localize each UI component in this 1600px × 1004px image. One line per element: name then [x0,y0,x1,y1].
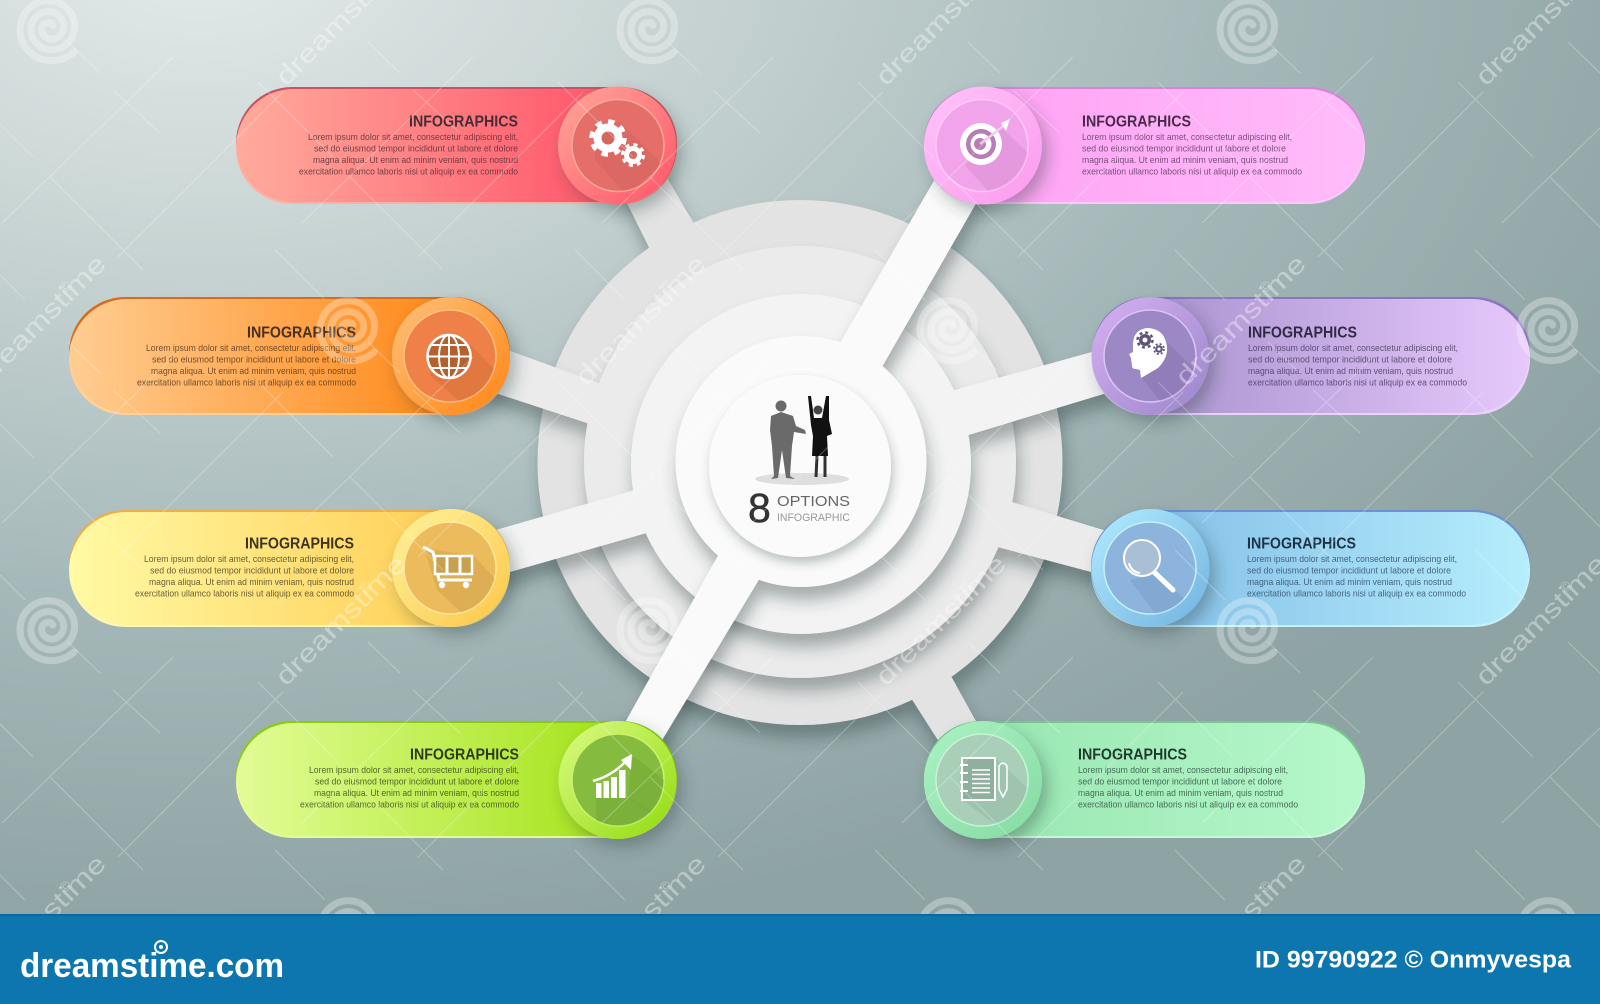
body text [1082,132,1302,178]
watermark overlay: © [56,277,75,296]
body text: sed do eiusmod tempor incididunt ut labore et dolore [315,776,519,788]
footer logo: dreamstime.com [20,947,284,985]
body text [1078,765,1298,810]
body text [135,554,354,600]
panel: pink option [924,86,1365,205]
body text [300,765,519,810]
watermark overlay: dreamstime [569,848,712,991]
body text [1248,343,1467,388]
panel: mint option [924,721,1365,839]
heading: INFOGRAPHICS [1248,324,1357,342]
body text: sed do eiusmod tempor incididunt ut labore et dolore [152,354,356,366]
watermark overlay: © [1256,877,1275,896]
body text: Lorem ipsum dolor sit amet, consectetur adipiscing elit, [146,343,356,354]
watermark overlay: © [656,277,675,296]
heading: INFOGRAPHICS [1082,114,1191,130]
panel: yellow option [69,509,510,627]
icon: gears [558,86,680,210]
body text: sed do eiusmod tempor incididunt ut labore et dolore [1082,144,1286,154]
heading: INFOGRAPHICS [245,536,354,552]
body text: exercitation ullamco laboris nisi ut aliquip ex ea commodo [137,378,356,388]
hub: outer ring with red and mint arms [538,150,1062,770]
watermark overlay: dreamstime [1169,848,1312,991]
body text: magna aliqua. Ut enim ad minim veniam, quis nostrud [1082,155,1288,166]
body text: magna aliqua. Ut enim ad minim veniam, quis nostrud [1248,366,1453,377]
watermark overlay: dreamstime [1169,248,1312,391]
body text: Lorem ipsum dolor sit amet, consectetur adipiscing elit, [308,132,518,143]
heading: INFOGRAPHICS [410,746,519,764]
icon: target [924,86,1042,205]
body text: exercitation ullamco laboris nisi ut aliquip ex ea commodo [135,588,354,600]
heading: INFOGRAPHICS [247,324,356,342]
body text: exercitation ullamco laboris nisi ut aliquip ex ea commodo [1078,800,1298,810]
watermark overlay: © [656,877,675,896]
icon: shopping cart [392,509,510,627]
hub: fourth ring with pink and lime arms [593,160,1001,780]
icon: magnifier [1092,509,1215,640]
watermark overlay: © [1556,577,1575,596]
body text: exercitation ullamco laboris nisi ut aliquip ex ea commodo [1247,588,1466,600]
body text: Lorem ipsum dolor sit amet, consectetur adipiscing elit, [1078,765,1288,776]
body text: sed do eiusmod tempor incididunt ut labore et dolore [1078,776,1282,788]
business people figures [755,396,849,485]
body text: magna aliqua. Ut enim ad minim veniam, quis nostrud [1247,577,1452,588]
label: 8 options infographic: 8 [748,485,771,531]
watermark overlay: © [356,577,375,596]
label: 8 options infographic [748,485,850,531]
watermark overlay: © [56,877,75,896]
body text: Lorem ipsum dolor sit amet, consectetur adipiscing elit, [1247,554,1457,565]
body text: sed do eiusmod tempor incididunt ut labore et dolore [1248,354,1452,366]
body text: Lorem ipsum dolor sit amet, consectetur adipiscing elit, [1082,132,1292,143]
body text: exercitation ullamco laboris nisi ut aliquip ex ea commodo [299,166,518,178]
body text: magna aliqua. Ut enim ad minim veniam, quis nostrud [151,366,356,377]
panel: blue option [1091,509,1530,640]
hub: third ring with yellow and purple arms [480,294,1110,634]
label: 8 options infographic: INFOGRAPHIC [777,512,850,524]
heading: INFOGRAPHICS [1078,746,1187,764]
watermark overlay: dreamstime [269,548,412,691]
body text: magna aliqua. Ut enim ad minim veniam, quis nostrud [1078,788,1283,799]
hub: second ring with orange and blue arms [480,246,1110,678]
panel: red option [236,86,680,210]
watermark overlay: dreamstime [1469,548,1600,691]
footer bar [0,914,1600,1004]
body text [137,343,356,388]
footer image id and credit: ID 99790922 © Onmyvespa [1255,946,1572,974]
watermark overlay: © [956,577,975,596]
label: 8 options infographic: OPTIONS [777,493,850,510]
heading: INFOGRAPHICS [1247,536,1356,552]
body text: Lorem ipsum dolor sit amet, consectetur adipiscing elit, [1248,343,1458,354]
body text: exercitation ullamco laboris nisi ut aliquip ex ea commodo [1082,166,1302,178]
body text: magna aliqua. Ut enim ad minim veniam, quis nostrud [149,577,354,588]
body text: Lorem ipsum dolor sit amet, consectetur adipiscing elit, [309,765,519,776]
body text: exercitation ullamco laboris nisi ut aliquip ex ea commodo [1248,378,1467,388]
panel: purple option [1092,297,1530,420]
body text: sed do eiusmod tempor incididunt ut labore et dolore [314,144,518,154]
body text: sed do eiusmod tempor incididunt ut labore et dolore [150,566,354,576]
heading: INFOGRAPHICS [409,114,518,130]
body text [299,132,518,178]
watermark overlay: dreamstime [569,248,712,391]
body text: exercitation ullamco laboris nisi ut aliquip ex ea commodo [300,800,519,810]
icon: notebook and pencil [924,721,1042,839]
panel: orange option [69,297,510,420]
body text: sed do eiusmod tempor incididunt ut labore et dolore [1247,566,1451,576]
icon: growth chart [558,721,690,860]
body text [1247,554,1466,600]
hub: center disc [709,375,891,557]
watermark overlay: © [1256,277,1275,296]
icon: globe [392,297,510,420]
panel: lime option [236,721,690,860]
body text: magna aliqua. Ut enim ad minim veniam, quis nostrud [313,155,518,166]
watermark overlay: dreamstime [869,548,1012,691]
body text: magna aliqua. Ut enim ad minim veniam, quis nostrud [314,788,519,799]
body text: Lorem ipsum dolor sit amet, consectetur adipiscing elit, [144,554,354,565]
icon: head with gears [1092,297,1210,420]
